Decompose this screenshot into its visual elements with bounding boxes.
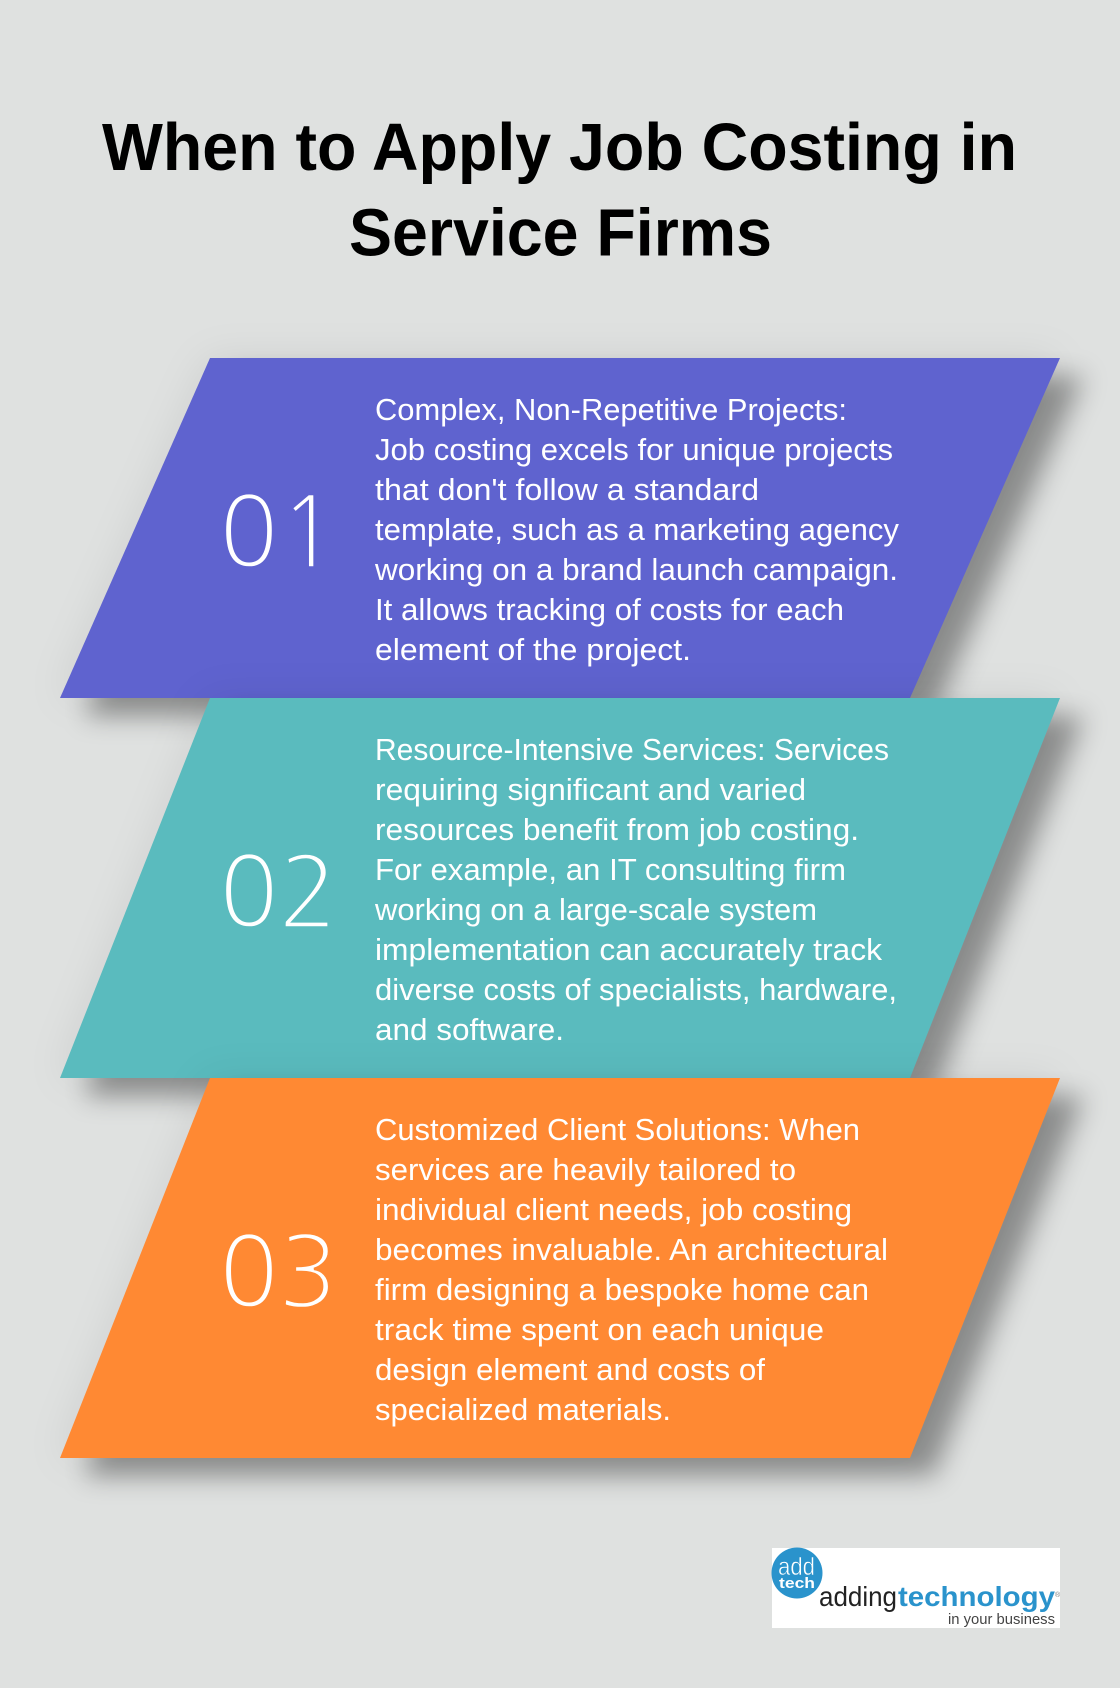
text block: panel 1: working on a brand launch campaign.: [374, 552, 898, 587]
text block: panel 3: individual client needs, job costing: [375, 1192, 852, 1227]
panel: resource-intensive services: [60, 698, 1060, 1078]
panel 2 parallelogram: [60, 698, 1060, 1078]
text block: panel 3: design element and costs of: [375, 1352, 765, 1387]
panel: complex, non-repetitive projects: [60, 358, 1060, 698]
text block: panel 3: [375, 1112, 888, 1427]
panel: customized client solutions: [60, 1078, 1060, 1458]
text block: panel 3: Customized Client Solutions: When: [375, 1112, 860, 1147]
number 01: 01: [219, 484, 338, 582]
title: When to Apply Job Costing in: [102, 110, 1017, 185]
text block: panel 2: Resource-Intensive Services: Services: [375, 732, 889, 767]
text block: panel 1: Complex, Non-Repetitive Projects:: [375, 392, 847, 427]
number 03: 03: [219, 1224, 338, 1322]
text block: panel 3: services are heavily tailored to: [375, 1152, 796, 1187]
logo wordmark: ®: [1055, 1591, 1061, 1599]
text block: panel 3: firm designing a bespoke home can: [375, 1272, 869, 1307]
logo badge circle: add: [778, 1553, 815, 1581]
logo badge circle: tech: [779, 1575, 815, 1592]
text block: panel 1: template, such as a marketing agency: [375, 512, 899, 547]
title: Service Firms: [349, 196, 772, 270]
text block: panel 1: Job costing excels for unique projects: [375, 432, 893, 467]
text block: panel 2: requiring significant and varied: [375, 772, 806, 807]
logo badge circle: [772, 1548, 822, 1598]
text block: panel 2: working on a large-scale system: [374, 892, 817, 927]
title: [102, 110, 1017, 270]
text block: panel 2: diverse costs of specialists, hardware,: [375, 972, 897, 1007]
text block: panel 3: specialized materials.: [375, 1392, 671, 1427]
text block: panel 1: It allows tracking of costs for each: [375, 592, 844, 627]
logo wordmark: technology: [898, 1581, 1055, 1612]
text block: panel 3: track time spent on each unique: [375, 1312, 824, 1347]
logo wordmark: adding: [819, 1581, 897, 1612]
logo wordmark: [819, 1581, 1061, 1628]
text block: panel 1: [374, 392, 899, 667]
text block: panel 1: element of the project.: [375, 632, 691, 667]
text block: panel 2: and software.: [375, 1012, 564, 1047]
text block: panel 2: For example, an IT consulting firm: [375, 852, 846, 887]
text block: panel 3: becomes invaluable. An architectural: [375, 1232, 888, 1267]
text block: panel 2: implementation can accurately track: [375, 932, 882, 967]
panel 3 parallelogram: [60, 1078, 1060, 1458]
number 02: 02: [219, 844, 338, 942]
logo wordmark: in your business: [948, 1611, 1055, 1628]
panel 1 parallelogram: [60, 358, 1060, 698]
text block: panel 2: resources benefit from job costing.: [375, 812, 859, 847]
text block: panel 2: [374, 732, 897, 1047]
text block: panel 1: that don't follow a standard: [375, 472, 759, 507]
logo: adding technology: [772, 1548, 1061, 1628]
